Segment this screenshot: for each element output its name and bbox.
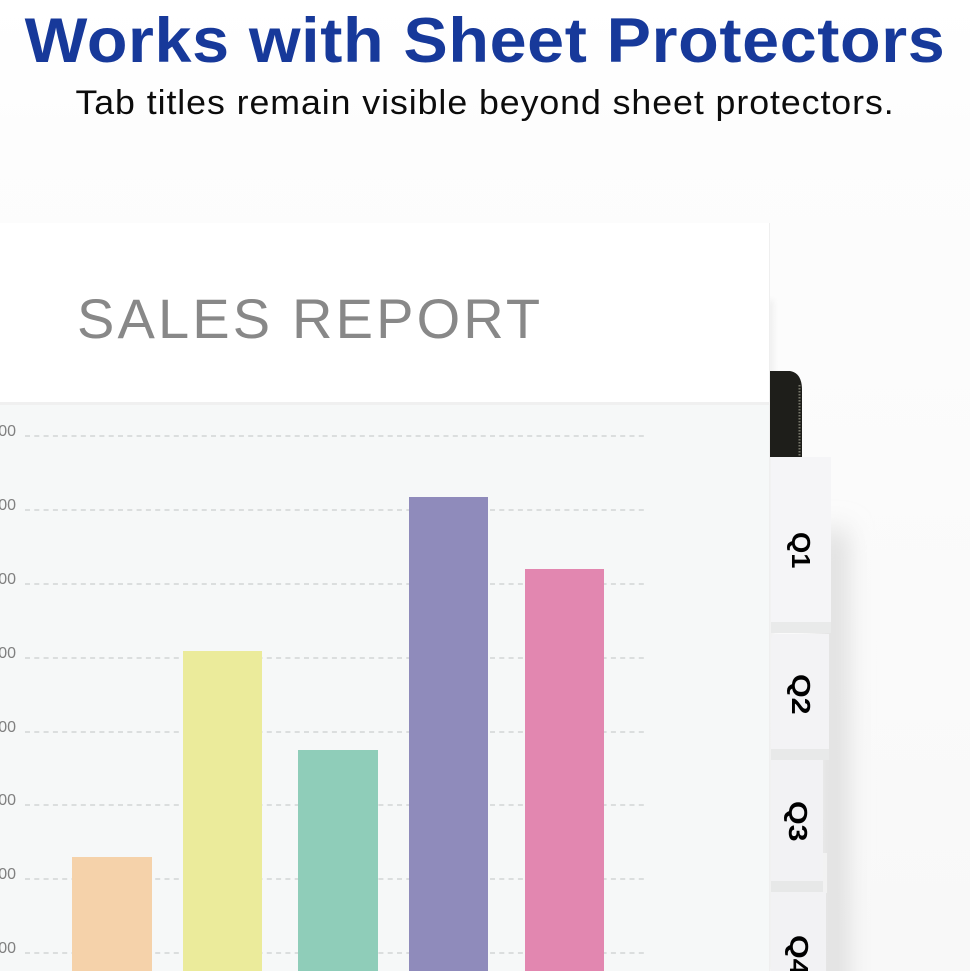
black tab xyxy=(770,371,802,457)
tab: Q2 xyxy=(771,634,829,760)
tab: Q3: Q3 xyxy=(783,801,813,842)
subtitle: Tab titles remain visible beyond sheet protectors. xyxy=(75,84,895,122)
bars xyxy=(72,857,152,971)
tab shadow xyxy=(820,530,846,971)
tab: Q3 xyxy=(771,760,827,893)
sheet shadow xyxy=(768,300,773,971)
bar chart xyxy=(0,423,645,971)
report sheet xyxy=(0,223,770,971)
tab: Q2: Q2 xyxy=(786,674,816,715)
tab: Q1 xyxy=(771,457,831,633)
chart panel xyxy=(0,404,770,971)
grid lines xyxy=(25,436,645,953)
axis labels xyxy=(0,423,16,957)
tab: Q4 xyxy=(771,892,826,971)
title: Works with Sheet Protectors xyxy=(25,6,945,76)
report title: SALES REPORT xyxy=(77,287,543,350)
tab: Q1: Q1 xyxy=(786,532,815,569)
